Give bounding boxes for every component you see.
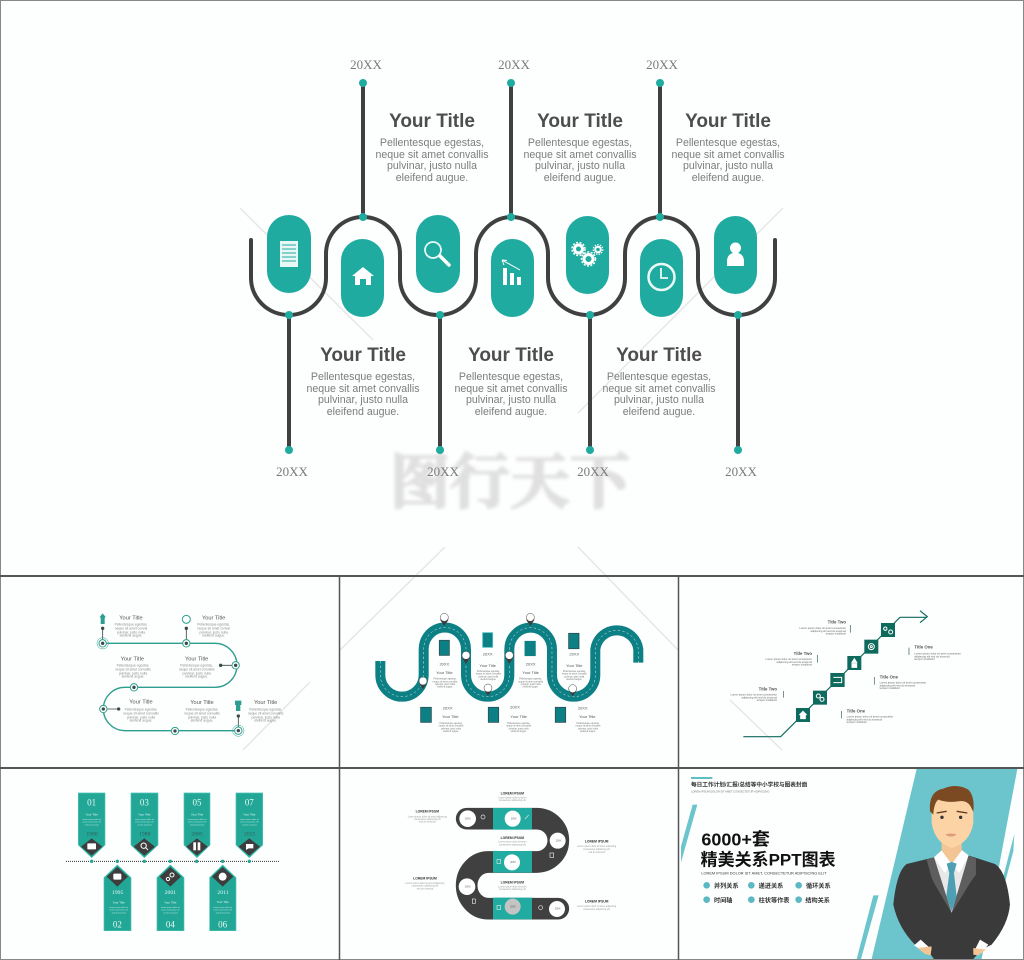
callout text: Title One [847,708,866,713]
labels: Your Title [254,700,277,706]
eyes and brows [937,811,967,813]
snake band [467,819,558,909]
text block 3: neque sit amet convallis [671,149,785,161]
callout text: tempor incididunt [757,698,777,702]
labels [115,615,284,723]
banner text: sed do eiusmod [190,824,204,826]
callout text: Lorem ipsum dolor sit amet consectetur [765,657,812,661]
text block 2 [523,111,637,184]
labels: Lorem ipsum dolor sit amet adipiscing [577,905,617,908]
panel: main timeline [251,57,785,479]
circle labels: 20XX [510,906,516,908]
background slashes [681,769,1017,959]
labels: pulvinar, justo nulla [564,675,585,678]
header text: 每日工作计划/汇报/总结等中小学校与图表封面 [691,781,808,789]
banner text: sed do eiusmod [137,824,151,826]
labels: sed do eiusmod [588,852,606,854]
year labels: 20XX [498,57,530,72]
winding timeline line [251,217,775,315]
stems [103,628,238,731]
labels: Your Title [129,700,153,706]
callout text: Lorem ipsum dolor sit amet consectetur [799,626,846,630]
main title: LOREM IPSUM DOLOR SIT AMET, CONSECTETUR ADIPISCING ELIT [701,871,827,875]
text block 1 [375,111,489,184]
text block 6: pulvinar, justo nulla [614,394,704,406]
labels: Lorem ipsum dolor sit amet [498,796,527,799]
text block 5: Your Title [468,345,554,366]
banner text: amet consectetur elit [188,821,207,824]
year labels: 20XX [427,464,459,479]
main title: 6000+套 [701,829,770,849]
banner text: Your Title [85,813,98,817]
pin heads [419,613,577,693]
labels: consectetur adipiscing elit [583,848,610,851]
labels: pulvinar, justo nulla [509,727,529,730]
labels: pulvinar, justo nulla [251,715,280,719]
labels: neque sit amet convallis [518,680,544,683]
numbers: 2001 [165,890,176,896]
icon pill: person [714,216,757,294]
callout text: Lorem ipsum dolor sit amet consectetur [847,714,893,718]
year labels [276,57,757,479]
labels: 20XX [569,651,580,656]
labels: eleifend augue. [480,679,497,681]
circle labels: 20XX [465,818,471,820]
connector dots [285,79,742,454]
circle labels [465,818,562,911]
labels: Your Title [190,700,214,706]
icon pill: bar chart [491,239,534,317]
labels: Pellentesque egestas, [115,622,147,626]
labels: Pellentesque egestas, [434,678,457,681]
banner text: Your Title [138,813,151,817]
text block 2: Your Title [537,111,623,132]
banner text: Your Title [216,900,229,904]
labels: consectetur adipiscing elit [499,799,526,802]
text block 3: eleifend augue. [692,172,764,184]
neck [942,838,962,864]
banner text: sed do eiusmod [112,912,126,914]
numbers: 1995 [112,890,123,896]
feature list: 循环关系 [806,882,831,890]
text block 6: eleifend augue. [623,406,695,418]
panel: promo cover slide [681,769,1017,959]
labels: Lorem ipsum dolor sit amet adipiscing [405,882,445,885]
labels: Your Title [185,656,208,662]
labels: eleifend augue. [254,719,277,723]
labels: pulvinar, justo nulla [127,715,155,719]
labels: pulvinar, justo nulla [199,630,228,634]
banner text: amet consectetur elit [110,909,128,912]
small icons [99,613,241,711]
text block 3: Pellentesque egestas, [676,137,780,149]
labels: pulvinar, justo nulla [182,671,211,675]
labels: eleifend augue. [185,675,208,679]
diamond icons [87,842,253,881]
cuffs and hands [914,940,932,955]
labels: neque sit amet convallis [248,711,284,715]
text block 1: Pellentesque egestas, [380,137,484,149]
labels: Your Title [121,656,144,662]
banner text [82,813,259,914]
labels: consectetur adipiscing elit [583,908,610,911]
callout text [730,620,961,724]
shirt [934,848,969,913]
teal segments [493,808,532,919]
labels: 20XX [483,651,493,656]
numbers: 07 [245,798,254,808]
feature list: 柱状等作表 [759,897,789,905]
labels: Your Title [479,663,497,668]
feature list: 结构关系 [805,897,830,905]
banner text: Lorem ipsum dolor sit [161,906,180,909]
numbers: 2005 [191,831,203,837]
labels: eleifend augue. [443,731,459,733]
labels: Your Title [202,615,225,621]
panel: S-curve timeline thumbnail [97,613,284,736]
road [380,627,638,697]
labels: Your Title [522,670,540,675]
labels: Your Title [436,670,453,675]
labels: Lorem ipsum dolor sit amet adipiscing [408,815,448,818]
panel: snake path thumbnail [405,792,617,919]
labels: Pellentesque egestas, [477,670,500,673]
text block 2: pulvinar, justo nulla [535,160,625,172]
labels: LOREM IPSUM [585,900,609,904]
labels: Your Title [510,714,528,719]
panel: staircase thumbnail [730,611,961,737]
year labels: 20XX [646,57,678,72]
banner text: amet consectetur elit [213,909,232,912]
labels: LOREM IPSUM [416,810,439,814]
callout text: Title One [880,674,899,679]
main title [701,829,836,875]
dotted axis [66,860,279,863]
accent bar [691,777,712,779]
feature list: 递进关系 [759,882,783,890]
icon pill: document [267,215,311,293]
labels: neque sit amet convallis [115,667,151,671]
jacket [893,855,1010,959]
labels: neque sit amet convallis [179,667,215,671]
nodes [99,640,242,735]
year labels: 20XX [577,464,609,479]
labels: 20XX [439,661,450,666]
labels: neque sit amet convallis [439,725,464,728]
text block 2: eleifend augue. [544,172,616,184]
labels: 20XX [510,705,520,710]
banner text: Lorem ipsum dolor sit [187,818,207,821]
callout text: Lorem ipsum dolor sit amet consectetur [914,651,961,655]
banner text: Lorem ipsum dolor sit [240,818,259,821]
header text [691,781,808,793]
callout text: adipiscing elit sed do eiusmod [777,660,812,664]
labels: eleifend augue. [437,687,453,689]
text block 5: neque sit amet convallis [454,383,568,395]
labels: pulvinar, justo nulla [478,675,499,678]
text block 4: eleifend augue. [327,406,399,418]
numbers: 2011 [217,890,229,896]
labels: Your Title [119,615,143,621]
labels: 20XX [443,706,453,711]
circle labels: 20XX [510,862,516,864]
labels: Lorem ipsum dolor sit amet [498,885,527,888]
text block 6: Your Title [616,345,702,366]
labels: LOREM IPSUM [501,836,524,840]
small icons [472,815,554,910]
labels: neque sit amet convallis [184,711,220,715]
labels: LOREM IPSUM [501,881,524,885]
circle labels: 20XX [555,909,561,911]
text block 4: Pellentesque egestas, [311,371,415,383]
icon pill: magnifier [416,215,460,293]
year labels: 20XX [276,464,308,479]
labels: neque sit amet convallis [433,680,458,683]
callout text: adipiscing elit sed do eiusmod [880,683,916,687]
numbers: 06 [218,919,228,929]
text block 5 [454,345,568,418]
text block 3: pulvinar, justo nulla [683,160,773,172]
text block 6: Pellentesque egestas, [607,371,711,383]
labels: consectetur adipiscing elit [499,888,526,891]
banner text: sed do eiusmod [85,824,99,826]
labels: eleifend augue. [523,687,539,689]
main title: 精美关系PPT图表 [701,850,836,870]
labels: pulvinar, justo nulla [117,630,145,634]
callout text: tempor incididunt [792,663,812,667]
labels: Pellentesque egestas, [440,722,463,725]
banner text: Your Title [164,901,177,905]
map pins [419,616,577,697]
text block 1: pulvinar, justo nulla [387,160,477,172]
labels: neque sit amet conval [197,626,230,630]
labels: eleifend augue. [202,634,225,638]
callout text: Lorem ipsum dolor sit amet consectetur [880,680,926,684]
text block 5: eleifend augue. [475,406,547,418]
numbers: 03 [140,798,149,808]
labels: neque sit amet convallis [123,711,159,715]
numbers: 1980 [86,831,98,837]
watermark: 图行天下 [390,435,631,521]
numbers: 05 [192,798,202,808]
callout text: adipiscing elit sed do eiusmod [742,695,778,699]
labels: pulvinar, justo nulla [578,727,599,730]
labels: Pellentesque egestas, [197,622,230,626]
numbers [86,798,255,929]
banner text: Your Title [191,813,203,817]
icon pill: gears [566,216,609,294]
numbers: 2015 [244,831,255,837]
labels: consectetur adipiscing elit [412,885,439,888]
year labels: 20XX [350,57,382,72]
labels: Pellentesque egestas, [519,678,542,681]
year labels: 20XX [725,464,757,479]
banner text: Lorem ipsum dolor sit [213,906,233,909]
labels: Lorem ipsum dolor sit amet adipiscing [577,845,617,848]
callout text: Title Two [828,620,846,625]
banner text: amet consectetur elit [240,821,259,824]
labels: Pellentesque egestas, [563,670,586,673]
numbers: 1988 [139,831,150,837]
axis dots [90,860,251,863]
labels: neque sit amet conval [115,626,147,630]
numbers: 01 [87,798,96,808]
labels: Pellentesque egestas, [577,722,600,725]
labels: pulvinar, justo nulla [441,727,462,730]
labels: Pellentesque egestas, [180,663,213,667]
feature list: 时间轴 [714,897,732,905]
banner text: sed do eiusmod [216,912,230,914]
labels: pulvinar, justo nulla [119,671,147,675]
labels: Pellentesque egestas, [507,722,530,725]
banner text: Your Title [112,901,125,905]
stair line and arrow [743,611,927,737]
callout text: Title One [914,645,933,650]
vertical connector lines [289,83,738,450]
labels: pulvinar, justo nulla [521,683,541,686]
labels: Pellentesque egestas, [117,663,149,667]
icon pill: house [341,239,384,317]
labels: sed do eiusmod [417,889,434,891]
circle labels: 20XX [511,818,517,820]
text block 6: neque sit amet convallis [602,383,716,395]
text block 1: Your Title [389,111,475,132]
outer rings [97,638,244,736]
labels: eleifend augue. [566,679,583,681]
step icons [799,627,893,719]
labels: neque sit amet convallis [562,673,588,676]
labels: Your Title [566,663,583,668]
panel: banner timeline thumbnail [66,793,279,931]
text block 1: eleifend augue. [396,172,468,184]
banner text: sed do eiusmod [242,824,256,826]
tie [946,862,957,911]
curve [103,643,238,731]
numbers: 04 [166,919,175,929]
banner text: amet consectetur elit [161,909,180,912]
text block 4 [306,345,420,418]
text block 3: Your Title [685,111,771,132]
panel: road timeline thumbnail [380,613,638,733]
labels: neque sit amet convallis [476,673,502,676]
banner text: Your Title [243,813,256,817]
text block 4: pulvinar, justo nulla [318,394,408,406]
banner text: amet consectetur elit [135,821,154,824]
labels [433,651,601,733]
road centre line [380,627,638,697]
step squares [796,623,895,722]
labels: neque sit amet convallis [576,725,601,728]
circles [459,810,566,917]
callout text: adipiscing elit sed do eiusmod [914,654,950,658]
circle labels: 20XX [465,886,471,888]
callout text: adipiscing elit sed do eiusmod [811,629,846,633]
callout text: tempor incididunt [826,632,846,636]
labels: 20XX [526,661,536,666]
banner text: Lorem ipsum dolor sit [109,906,129,909]
hair [930,786,974,815]
callout text: tempor incididunt [914,657,935,661]
callout text: tempor incididunt [847,720,867,724]
text block 3 [671,111,785,184]
text block 1: neque sit amet convallis [375,149,489,161]
feature list [703,882,831,905]
labels: consectetur adipiscing elit [499,843,526,846]
labels: eleifend augue. [120,634,142,638]
labels: Pellentesque egestas, [249,707,282,711]
node centres [101,627,240,733]
banners [78,793,263,931]
labels: sed do eiusmod [419,822,436,824]
labels: Pellentesque egestas, [186,707,218,711]
head [932,795,973,848]
labels: LOREM IPSUM [413,877,437,881]
callout text: adipiscing elit sed do eiusmod [847,717,883,721]
callout text: Title Two [794,651,812,656]
labels: eleifend augue. [580,731,596,733]
labels: eleifend augue. [511,731,527,733]
banner text: Lorem ipsum dolor sit [82,818,102,821]
callout text: Title Two [759,687,777,692]
text block 2: neque sit amet convallis [523,149,637,161]
labels: Your Title [442,714,459,719]
numbers: 02 [113,919,122,929]
callout text: Lorem ipsum dolor sit amet consectetur [730,692,777,696]
labels: LOREM IPSUM [585,840,609,844]
lapels [927,855,976,913]
text block 4: Your Title [320,345,406,366]
text block 5: Pellentesque egestas, [459,371,563,383]
text block 5: pulvinar, justo nulla [466,394,556,406]
mouth [945,833,957,837]
labels: eleifend augue. [191,719,213,723]
labels: consectetur adipiscing elit [414,818,441,821]
text block 2: Pellentesque egestas, [528,137,632,149]
banner text: amet consectetur elit [83,821,101,824]
labels: eleifend augue. [130,719,152,723]
callout text: tempor incididunt [880,686,900,690]
labels [405,792,617,911]
labels: pulvinar, justo nulla [435,683,456,686]
icon pill: clock [640,239,683,317]
diamonds [81,838,260,887]
man illustration [893,786,1010,959]
icon tiles [421,633,579,722]
feature list: 并列关系 [714,882,739,890]
labels: LOREM IPSUM [501,792,524,796]
collar [934,851,969,873]
text block 4: neque sit amet convallis [306,383,420,395]
labels: Your Title [579,714,596,719]
labels: 20XX [578,706,588,711]
banner text: sed do eiusmod [163,912,177,914]
text block 6 [602,345,716,418]
labels: Pellentesque egestas, [125,707,157,711]
header text: LOREM IPSUM DOLOR SIT AMET CONSECTETUR ADIPISCING [691,789,769,793]
labels: Lorem ipsum dolor sit amet [498,841,527,844]
labels: neque sit amet convallis [506,725,532,728]
labels: pulvinar, justo nulla [188,715,216,719]
banner text: Lorem ipsum dolor sit [135,818,154,821]
circle labels: 20XX [556,840,562,842]
labels: eleifend augue. [122,675,144,679]
callout ticks and leaders [783,625,909,718]
